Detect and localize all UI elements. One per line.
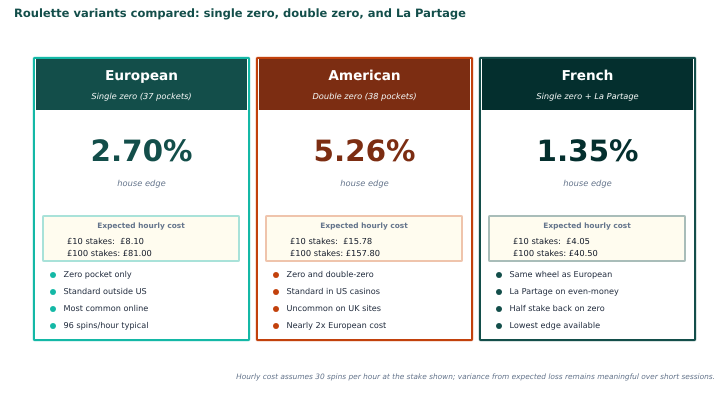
panel: French xyxy=(479,57,696,341)
label: house edge: house edge xyxy=(340,178,389,188)
bullet list: European: Zero pocket only xyxy=(64,269,132,279)
header: American xyxy=(259,59,470,110)
cost box: European xyxy=(42,215,240,262)
bullet list: European: 96 spins/hour typical xyxy=(64,320,148,330)
bullet list: European xyxy=(50,269,148,330)
bullet list: American: Uncommon on UK sites xyxy=(286,303,381,313)
bullet list: American xyxy=(273,269,386,330)
stat: European house edge: 2.70% xyxy=(91,134,192,168)
cost box: European: Expected hourly cost xyxy=(97,221,185,230)
cost box: European: £10 stakes: £8.10 xyxy=(67,236,144,246)
bullet list: French xyxy=(496,269,619,330)
bullet list: European: Standard outside US xyxy=(64,286,147,296)
cost box: French xyxy=(488,215,686,262)
cost box: American xyxy=(265,215,463,262)
bullet list: French: Half stake back on zero xyxy=(510,303,605,313)
bullet list: French: La Partage on even-money xyxy=(510,286,619,296)
header: European: Single zero (37 pockets) xyxy=(91,90,192,100)
cost box: American: £10 stakes: £15.78 xyxy=(290,236,372,246)
header: French: Single zero + La Partage xyxy=(536,90,639,100)
header: European: European xyxy=(105,68,178,84)
footnote: Hourly cost assumes 30 spins per hour at the stake shown; variance from expected loss remains meaningful over short sessions. xyxy=(236,372,715,381)
header: French: French xyxy=(562,68,613,84)
bullet list: European: Most common online xyxy=(64,303,148,313)
bullet list: French: Lowest edge available xyxy=(510,320,600,330)
header: European xyxy=(36,59,247,110)
panel: American xyxy=(256,57,473,341)
bullet list: American: Standard in US casinos xyxy=(286,286,380,296)
cost box: American: Expected hourly cost xyxy=(320,221,408,230)
stat: French house edge: 1.35% xyxy=(537,134,638,168)
bullet list: American: Zero and double-zero xyxy=(286,269,374,279)
header: French xyxy=(482,59,693,110)
header: American: Double zero (38 pockets) xyxy=(312,90,417,100)
cost box: French: £100 stakes: £40.50 xyxy=(513,248,598,258)
panel: European xyxy=(33,57,250,341)
stat: American house edge: 5.26% xyxy=(314,134,415,168)
cost box: American: £100 stakes: £157.80 xyxy=(290,248,380,258)
label: house edge: house edge xyxy=(563,178,612,188)
cost box: French: £10 stakes: £4.05 xyxy=(513,236,590,246)
bullet list: American: Nearly 2x European cost xyxy=(286,320,386,330)
bullet list: French: Same wheel as European xyxy=(510,269,612,279)
label: house edge: house edge xyxy=(117,178,166,188)
cost box: French: Expected hourly cost xyxy=(543,221,631,230)
title: Roulette variants compared: single zero, double zero, and La Partage xyxy=(14,6,466,20)
cost box: European: £100 stakes: £81.00 xyxy=(67,248,152,258)
header: American: American xyxy=(328,68,401,84)
